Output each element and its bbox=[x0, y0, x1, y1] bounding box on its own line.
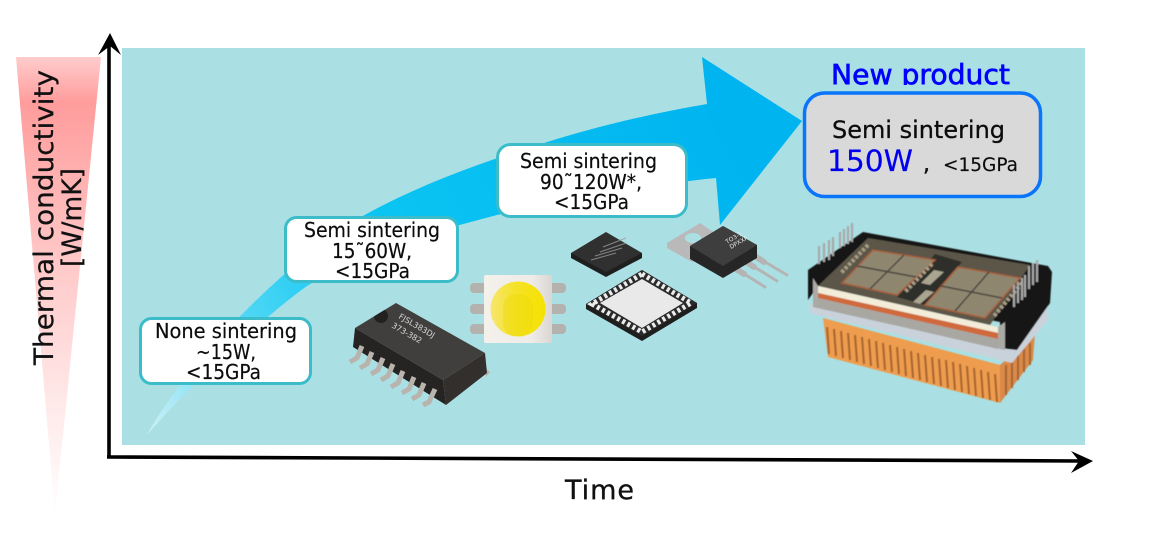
thermal conductivity gradient triangle bbox=[16, 57, 101, 515]
x axis arrow bbox=[107, 451, 1093, 473]
cut-away layers bbox=[813, 278, 1005, 350]
label box: semi sintering 90-120W: Semi sintering bbox=[520, 149, 657, 173]
label box: semi sintering 90-120W: 90˜120W*, bbox=[540, 170, 642, 194]
label box: none sintering bbox=[140, 318, 310, 384]
chip: LED bbox=[470, 275, 566, 343]
growth arrow bbox=[147, 57, 802, 435]
y axis label: Thermal conductivity bbox=[29, 70, 60, 366]
label box: semi sintering 15-60W bbox=[286, 218, 458, 283]
center column bbox=[897, 254, 962, 305]
label box: semi sintering 90-120W: <15GPa bbox=[554, 190, 629, 214]
module interior bbox=[818, 238, 1030, 325]
y axis arrow bbox=[98, 33, 121, 458]
chip: large QFN bbox=[586, 270, 697, 341]
label box: semi sintering 15-60W: 15˜60W, bbox=[332, 239, 412, 263]
chip: SOIC package: FJSL383DJ bbox=[397, 312, 436, 340]
new product box bbox=[804, 93, 1040, 196]
new product heading: New product bbox=[831, 58, 1010, 91]
y axis label bbox=[29, 70, 88, 366]
chip: SOIC package: 373-382 bbox=[390, 321, 423, 345]
chip: transistor: TO3-1 bbox=[724, 230, 744, 246]
label box: none sintering: ~15W, bbox=[196, 340, 256, 364]
heat sink fins bbox=[823, 318, 1035, 403]
new product box: Semi sintering bbox=[832, 116, 1005, 144]
y axis label: [W/mK] bbox=[57, 168, 88, 267]
label box: semi sintering 90-120W bbox=[498, 144, 686, 216]
chip: transistor: DPXXF bbox=[728, 234, 750, 251]
label box: semi sintering 15-60W: <15GPa bbox=[335, 259, 410, 283]
label box: semi sintering 15-60W: Semi sintering bbox=[304, 218, 440, 242]
black case bbox=[808, 232, 1052, 350]
label box: none sintering: None sintering bbox=[155, 319, 297, 343]
chip: SOIC package bbox=[350, 303, 490, 405]
x axis label: Time bbox=[564, 475, 634, 506]
chip groups bbox=[841, 245, 1022, 318]
new product box: 150W bbox=[827, 144, 913, 178]
power module with heat sink bbox=[808, 223, 1052, 403]
new product box: <15GPa bbox=[943, 154, 1018, 176]
base plate bbox=[810, 303, 1048, 363]
chip: transistor bbox=[667, 223, 787, 287]
connector pins bbox=[819, 223, 1037, 307]
chip: small QFN bbox=[571, 232, 642, 277]
label box: none sintering: <15GPa bbox=[186, 360, 261, 384]
panel: teal background bbox=[122, 48, 1085, 445]
new product box: , bbox=[923, 152, 930, 177]
